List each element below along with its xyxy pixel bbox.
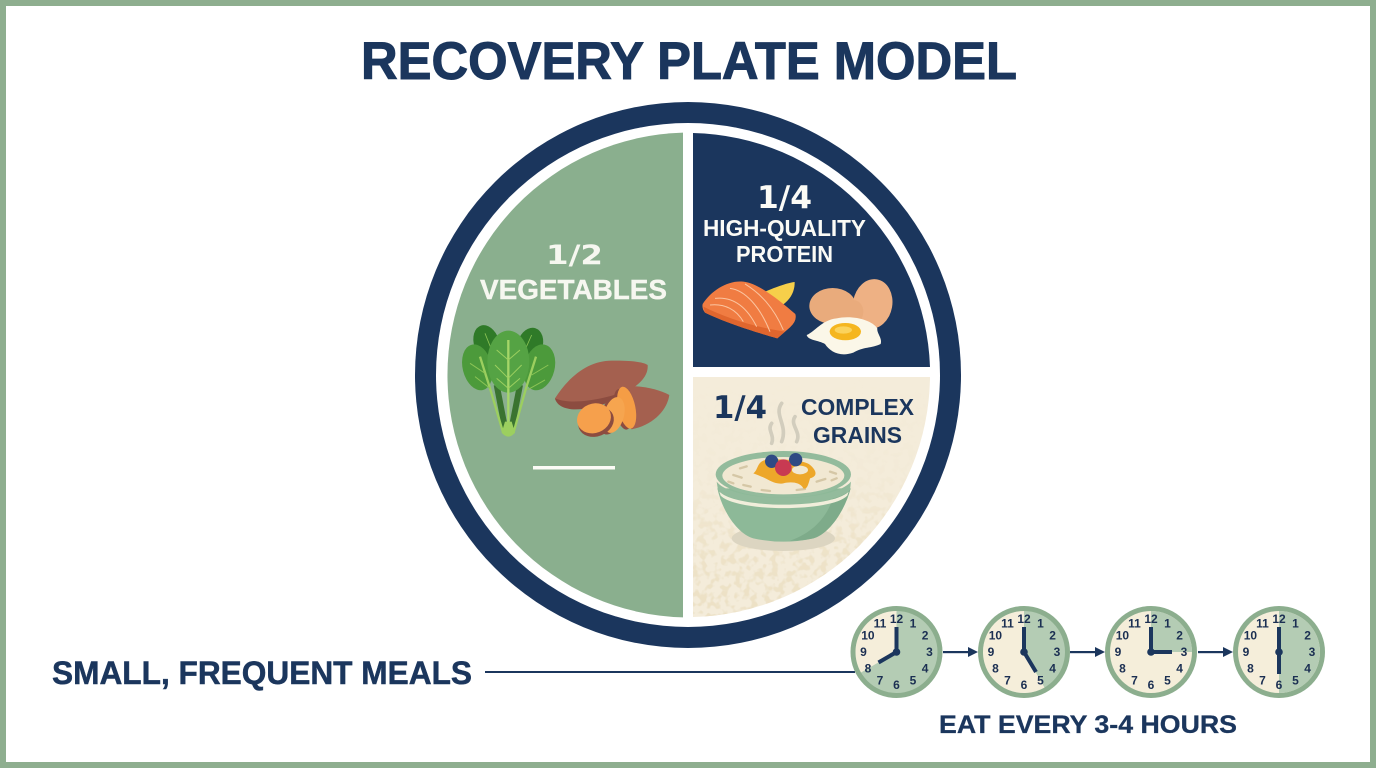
arrow: clock 2 to 3	[1070, 647, 1105, 657]
clock: 3 o'clock: 3	[1181, 645, 1188, 659]
clock: 3 o'clock: 9	[1115, 645, 1122, 659]
clock: 8 o'clock: 8	[865, 662, 872, 676]
clock: 3 o'clock: 7	[1131, 674, 1138, 688]
clock: 8 o'clock: 5	[910, 674, 917, 688]
plate rim	[415, 102, 961, 648]
clock: 5 o'clock: 9	[988, 645, 995, 659]
clock: 6 o'clock: 12	[1272, 612, 1286, 626]
clock: 8 o'clock: 6	[893, 678, 900, 692]
clock: 5 o'clock	[978, 606, 1070, 698]
clock: 8 o'clock: 12	[890, 612, 903, 626]
protein fraction: 1/4	[757, 180, 812, 216]
plate	[415, 102, 961, 648]
connector line	[485, 671, 855, 673]
clock: 3 o'clock: 6	[1148, 678, 1155, 692]
clock: 8 o'clock: 11	[874, 616, 887, 630]
clock: 6 o'clock: 11	[1256, 616, 1269, 630]
clock: 8 o'clock: 4	[922, 662, 929, 676]
icon: spinach	[457, 322, 560, 437]
clock: 8 o'clock: 9	[860, 645, 867, 659]
clock: 8 o'clock: 10	[861, 628, 875, 642]
icon: sweet potatoes	[555, 361, 669, 442]
title: RECOVERY PLATE MODEL	[361, 32, 1017, 91]
arrow: clock 1 to 2	[943, 647, 978, 657]
clock: 5 o'clock: 12	[1017, 612, 1031, 626]
icon: steam	[770, 403, 798, 443]
icon: oatmeal bowl	[716, 451, 851, 551]
label: small frequent meals: SMALL, FREQUENT MEALS	[52, 655, 472, 691]
clock: 5 o'clock: 4	[1049, 662, 1056, 676]
clock: 6 o'clock: 8	[1247, 662, 1254, 676]
clock: 8 o'clock: 3	[926, 645, 933, 659]
clock: 6 o'clock: 5	[1292, 674, 1299, 688]
arrow: clock 3 to 4	[1198, 647, 1233, 657]
clock: 5 o'clock: 1	[1037, 616, 1044, 630]
clock: 5 o'clock: 6	[1021, 678, 1028, 692]
protein label: HIGH-QUALITY	[703, 215, 866, 241]
clock: 3 o'clock: 5	[1164, 674, 1171, 688]
panel: vegetables	[447, 133, 683, 617]
clock: 3 o'clock: 8	[1119, 662, 1126, 676]
clock: 6 o'clock: 10	[1244, 628, 1257, 642]
clock: 5 o'clock: 5	[1037, 674, 1044, 688]
clock: 5 o'clock: 10	[989, 628, 1002, 642]
panel: grains: GRAINS	[813, 422, 902, 448]
clock: 5 o'clock: 2	[1049, 628, 1056, 642]
clock: 6 o'clock: 2	[1304, 628, 1311, 642]
divider bar	[533, 466, 615, 470]
clock: 6 o'clock: 3	[1309, 645, 1316, 659]
clock: 5 o'clock: 7	[1004, 674, 1011, 688]
clock: 3 o'clock: 2	[1176, 628, 1183, 642]
grains label: COMPLEX	[801, 394, 915, 420]
clock: 8 o'clock	[850, 606, 942, 698]
clock: 5 o'clock: 3	[1054, 645, 1061, 659]
clock: 8 o'clock: 1	[910, 616, 917, 630]
clock: 3 o'clock: 1	[1164, 616, 1171, 630]
panel: grains	[693, 377, 933, 619]
clock: 6 o'clock	[1233, 606, 1325, 698]
clock: 8 o'clock: 7	[877, 674, 884, 688]
clock: 6 o'clock: 9	[1243, 645, 1250, 659]
clock: 6 o'clock: 6	[1276, 678, 1283, 692]
panel: protein	[693, 133, 930, 367]
icon: salmon with lemon	[702, 281, 796, 338]
vegetables label: VEGETABLES	[480, 274, 667, 305]
panel: protein: PROTEIN	[736, 241, 833, 267]
caption: eat every 3-4 hours: EAT EVERY 3-4 HOURS	[939, 711, 1237, 739]
clock: 6 o'clock: 1	[1292, 616, 1299, 630]
clock: 3 o'clock	[1105, 606, 1197, 698]
clock: 8 o'clock: 2	[922, 628, 929, 642]
clock: 3 o'clock: 11	[1128, 616, 1141, 630]
clock: 6 o'clock: 7	[1259, 674, 1266, 688]
clock: 3 o'clock: 12	[1144, 612, 1158, 626]
clock: 3 o'clock: 10	[1116, 628, 1129, 642]
clock: 5 o'clock: 11	[1001, 616, 1014, 630]
icon: eggs	[807, 276, 896, 354]
clock: 5 o'clock: 8	[992, 662, 999, 676]
vegetables fraction: 1/2	[546, 240, 603, 271]
grains fraction: 1/4	[713, 390, 767, 426]
clock: 6 o'clock: 4	[1304, 662, 1311, 676]
clock: 3 o'clock: 4	[1176, 662, 1183, 676]
